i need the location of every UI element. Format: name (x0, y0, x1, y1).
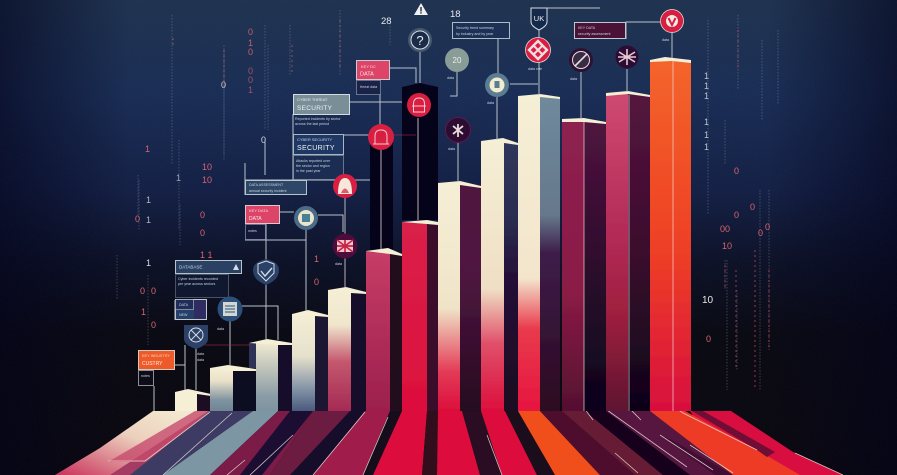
binary digits right: 0 (758, 228, 763, 238)
floor stripes (55, 411, 843, 475)
callout: grey security box (294, 94, 350, 126)
icon: flag circle dark (616, 46, 638, 68)
callout: pink box top (356, 60, 390, 94)
icon: shield gear (184, 325, 208, 362)
binary digits right: 10 (722, 241, 732, 251)
binary digits left: 10 (202, 162, 212, 172)
callout: grey security box: SECURITY (297, 105, 333, 112)
binary digits right: 1 (704, 91, 709, 101)
binary digits right: 0 (734, 210, 739, 220)
callout: pink box middle: DATA (249, 216, 262, 222)
icon: no-entry circle: data (570, 77, 577, 81)
callout: navy security box: CYBER SECURITY (297, 137, 332, 142)
binary digits left: 1 (248, 38, 253, 48)
binary digits left: 0 (151, 320, 156, 330)
binary digits left: 1 (146, 258, 151, 268)
icon: grey circle: data (447, 76, 454, 80)
callout: 18 box (452, 22, 510, 38)
icon: red lock circle 2 (368, 124, 394, 150)
binary digits right: 1 (704, 71, 709, 81)
callout: maroon box: security assessment (578, 32, 611, 36)
callout: grey security box: across the last period (295, 122, 329, 126)
bar 4 (292, 310, 328, 411)
bar 11 (562, 118, 606, 411)
number labels (381, 9, 461, 27)
binary digits right: 0 (734, 166, 739, 176)
icon: red hood circle (333, 174, 357, 198)
binary digits left: 0 (248, 75, 253, 85)
icon: UK flag circle (332, 234, 358, 266)
bar 8 (438, 181, 481, 411)
callout: navy box lower: per year across sectors (178, 282, 216, 286)
icon: slate bell circle (485, 73, 509, 105)
bar 7 (402, 220, 438, 411)
icon: question circle: ? (416, 33, 424, 48)
callout: orange box (138, 350, 174, 386)
callout: maroon box: KEY DATA (578, 26, 596, 30)
callout: grey security box: CYBER THREAT (297, 97, 328, 102)
callout: navy box lower: DATABASE (179, 264, 202, 270)
binary digits right: 0 (765, 222, 770, 232)
callout: pink box middle: KEY DATA (249, 208, 268, 213)
binary digits left: 0 (200, 210, 205, 220)
icon: slate bell circle: data (487, 101, 494, 105)
binary digits left: 0 (151, 286, 156, 296)
binary digits right: 1 (704, 142, 709, 152)
callout: navy security box (294, 134, 344, 180)
bar 1 (175, 389, 211, 411)
icon: question circle (408, 28, 432, 52)
icon: crimson badge (526, 38, 550, 71)
icon: shield UK (531, 8, 547, 30)
binary digits left: 1 (141, 307, 146, 317)
binary digits right: 1 (704, 81, 709, 91)
icon: red circle check (660, 10, 684, 42)
binary digits left: 1 (146, 215, 151, 225)
callout: blue wide box: annual security incident (249, 189, 287, 193)
icon: shield UK: UK (534, 14, 544, 23)
binary digits right: 1 (704, 130, 709, 140)
binary digits left: 0 (248, 66, 253, 76)
bar 2 (210, 365, 256, 411)
binary digits left: 1 (314, 254, 319, 264)
connector lines (154, 8, 672, 411)
callout: navy box lower (176, 260, 242, 320)
icon: grey circle: 20 (453, 56, 462, 65)
binary digits right: 10 (702, 295, 714, 306)
black background columns (370, 83, 438, 250)
callout: orange box: CUSTRY (142, 361, 163, 367)
binary digits right: 0 (750, 202, 755, 212)
binary digits left: 1 (145, 144, 150, 154)
bar 10 (518, 94, 560, 411)
binary digits left: 1 (248, 85, 253, 95)
callout: navy security box: the sector and region (296, 164, 330, 168)
binary digits left: 1 (176, 173, 181, 183)
icon: dark badge circle: data (448, 147, 455, 151)
callout: pink box middle (246, 206, 280, 240)
callout: pink box top: DATA (360, 72, 374, 78)
bar 6 (366, 248, 402, 411)
callout: navy security box: in the past year (296, 169, 321, 173)
binary digits left: 1 1 (200, 250, 213, 260)
binary digits left (117, 10, 390, 345)
icon: document circle (217, 296, 242, 331)
binary digits left: 0 (248, 27, 253, 37)
icon: grey circle (445, 48, 469, 80)
binary digits left: 0 (248, 47, 253, 57)
callout: navy security box: Attacks reported over (296, 159, 331, 163)
floor highlight lines (108, 60, 843, 475)
callout: navy security box: SECURITY (297, 145, 335, 152)
icon: crimson badge: data rate (528, 67, 542, 71)
icon: shield gear: data (197, 358, 204, 362)
callout: blue wide box (246, 180, 306, 194)
binary digits right: 00 (720, 224, 730, 234)
icon: shield check (253, 259, 279, 285)
bar 12 (606, 91, 650, 411)
icon: warning triangle (414, 3, 428, 15)
callout: 18 box: Security trend summary (456, 26, 494, 30)
binary digits left: 0 (221, 80, 226, 90)
callout: maroon box (574, 22, 626, 38)
callout: navy box lower: NEW (179, 313, 188, 317)
binary digits right: 1 (704, 117, 709, 127)
bar 3 (249, 339, 292, 411)
callout: orange box: KEY INDUSTRY (142, 354, 170, 358)
number labels: 28 (381, 16, 392, 27)
bar chart (175, 57, 691, 411)
binary digits left: 0 (135, 214, 140, 224)
callout: pink box middle: notes (248, 229, 257, 233)
binary digits left: 0 (140, 286, 145, 296)
icon: no-entry circle (569, 48, 593, 81)
bar 9 (481, 138, 518, 411)
icon: red circle check: data (662, 38, 669, 42)
callout: grey security box: Reported incidents by sector (295, 117, 341, 121)
binary digits left: 0 (261, 135, 266, 145)
binary digits left: 0 (200, 228, 205, 238)
bar 5 (328, 287, 366, 411)
callout: blue wide box: DATA ASSESSMENT (249, 183, 284, 187)
binary digits left: 10 (202, 175, 212, 185)
icon: document circle: data (217, 327, 224, 331)
callout: 18 box: by industry and by year (456, 32, 494, 36)
callout: orange box: notes (141, 374, 150, 378)
icon: slate lock circle (294, 206, 318, 230)
binary digits right (702, 15, 778, 390)
callout: navy box lower: DATA (179, 303, 189, 307)
binary digits left: 0 (314, 277, 319, 287)
binary digits left: 1 (146, 195, 151, 205)
callout: pink box top: threat data (360, 85, 377, 89)
bar center highlight lines (584, 60, 673, 411)
callout: pink box top: KEY DC (361, 64, 376, 69)
callout: navy box lower: Cyber incidents recorded (178, 277, 218, 281)
number labels: 18 (450, 9, 461, 20)
icon: red lock circle 1 (407, 93, 431, 117)
icon: UK flag circle: data (335, 262, 342, 266)
bar 13 (650, 57, 691, 411)
icon: shield gear: data (197, 352, 204, 356)
icon: dark badge circle (446, 118, 470, 151)
binary digits right: 0 (706, 334, 711, 344)
